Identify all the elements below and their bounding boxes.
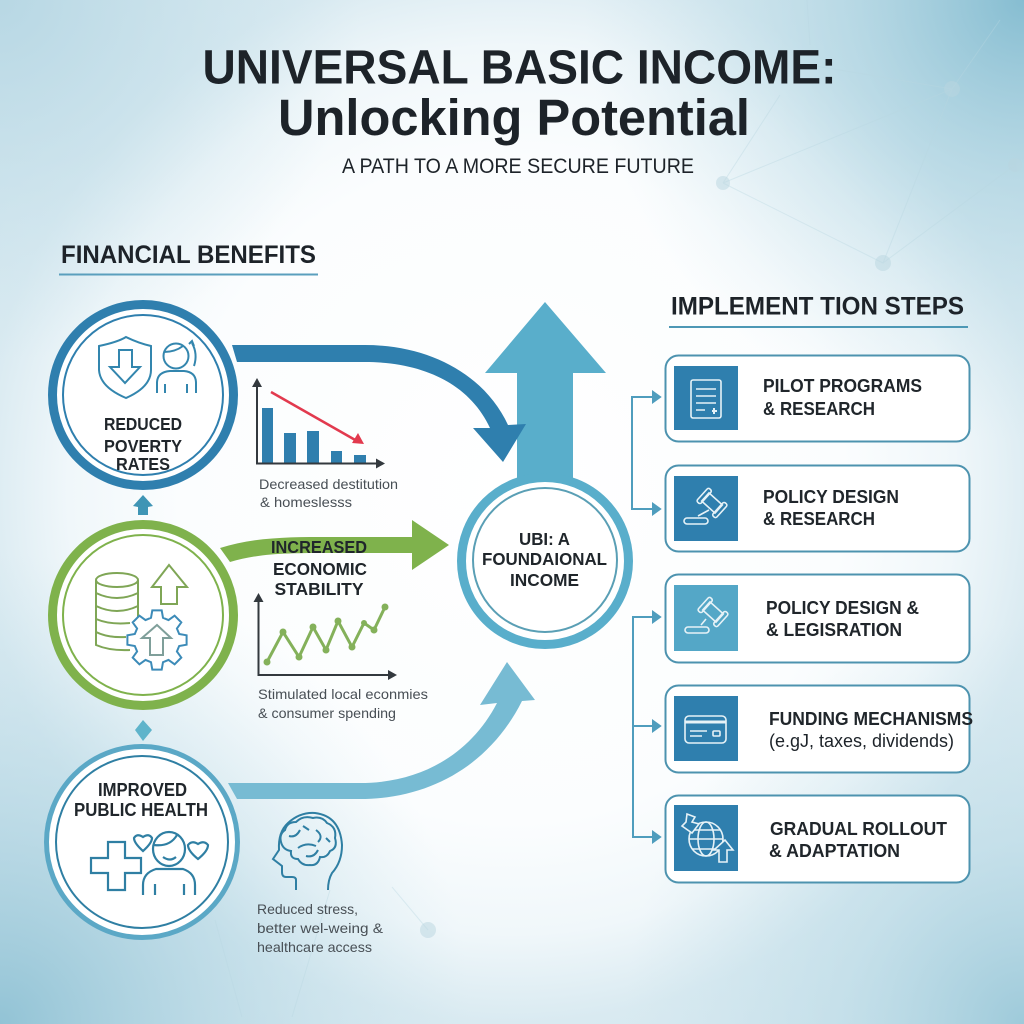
card: policy design and legislation <box>666 574 970 662</box>
caption: economies <box>258 686 428 721</box>
card text <box>769 819 947 861</box>
card text: PILOT PROGRAMS <box>763 376 922 396</box>
heading: financial benefits: FINANCIAL BENEFITS <box>61 241 316 269</box>
circle label: RATES <box>116 454 170 474</box>
circle label: IMPROVED <box>98 780 187 800</box>
card: pilot programs <box>666 356 970 442</box>
card text: FUNDING MECHANISMS <box>769 709 973 729</box>
card text <box>763 376 922 419</box>
circle label <box>74 780 208 820</box>
panel: public health circle <box>46 746 238 938</box>
text: increased economic stability: ECONOMIC <box>273 559 367 579</box>
caption: health: healthcare access <box>257 939 372 955</box>
circle label: PUBLIC HEALTH <box>74 800 208 820</box>
chart: poverty bar chart <box>252 378 385 468</box>
panel: reduced poverty rates circle <box>52 304 234 486</box>
text: increased economic stability: INCREASED <box>271 537 367 557</box>
icon: medical cross <box>91 842 141 890</box>
chart: line chart <box>254 593 397 680</box>
caption: health: better wel-weing & <box>257 920 384 936</box>
card: policy design and research <box>666 466 970 552</box>
icon: head with brain <box>273 813 342 890</box>
panel: economic stability circle <box>52 524 234 706</box>
arrow: green arrow to UBI <box>220 520 449 570</box>
icon: coin stack <box>96 573 138 650</box>
card text: POLICY DESIGN <box>763 487 899 507</box>
card text: & LEGISRATION <box>766 620 902 640</box>
card text: & RESEARCH <box>763 509 875 529</box>
caption: health <box>257 901 384 955</box>
card: funding mechanisms <box>666 686 973 772</box>
caption: poverty: Decreased destitution <box>259 476 398 492</box>
icon: person <box>157 341 196 393</box>
caption: economies: Stimulated local econmies <box>258 686 428 702</box>
icon: up arrow <box>152 565 187 604</box>
subtitle: A PATH TO A MORE SECURE FUTURE <box>342 155 694 178</box>
title: Unlocking Potential <box>278 89 750 146</box>
icon: shield with down arrow <box>99 337 151 398</box>
connector: bottom bracket <box>633 612 660 842</box>
circle label <box>104 414 182 474</box>
card text: POLICY DESIGN & <box>766 598 919 618</box>
title: UNIVERSAL BASIC INCOME: <box>202 42 836 94</box>
arrow: light blue curved arrow to UBI <box>228 662 535 799</box>
caption: economies: & consumer spending <box>258 705 396 721</box>
caption: poverty <box>259 476 398 510</box>
icon: credit card <box>685 716 726 743</box>
card text <box>766 598 919 640</box>
card: gradual rollout <box>666 796 970 882</box>
icon: smiling person with hearts <box>134 832 208 895</box>
central label: FOUNDAIONAL <box>482 549 607 569</box>
icon: document <box>691 380 721 418</box>
circle label: REDUCED <box>104 414 182 434</box>
circle label: POVERTY <box>104 436 182 456</box>
connector: top bracket <box>632 392 660 514</box>
icon: gavel <box>684 488 728 524</box>
panel: UBI central circle <box>462 478 628 644</box>
text: increased economic stability: STABILITY <box>274 579 364 599</box>
arrow: blue curved arrow to UBI <box>232 345 526 462</box>
caption: poverty: & homeslesss <box>260 494 352 510</box>
heading: implementation steps: IMPLEMENT TION STEPS <box>671 292 964 320</box>
caption: health: Reduced stress, <box>257 901 358 917</box>
title <box>202 42 836 146</box>
card text: & ADAPTATION <box>769 841 900 861</box>
small connector arrow: green to blue circle <box>133 495 153 515</box>
central label <box>482 529 607 590</box>
card text <box>769 709 973 751</box>
central label: UBI: A <box>519 529 570 549</box>
card text <box>763 487 899 529</box>
small connector diamond: green to health circle <box>135 720 152 741</box>
text: increased economic stability <box>271 537 367 599</box>
icon: gavel <box>685 597 729 633</box>
icon: globe with arrows <box>682 814 733 862</box>
card text: GRADUAL ROLLOUT <box>770 819 947 839</box>
icon: gear with arrow <box>127 610 187 670</box>
card text: & RESEARCH <box>763 399 875 419</box>
arrow: large up arrow from UBI <box>485 302 606 490</box>
central label: INCOME <box>510 570 579 590</box>
card text: (e.gJ, taxes, dividends) <box>769 731 954 751</box>
